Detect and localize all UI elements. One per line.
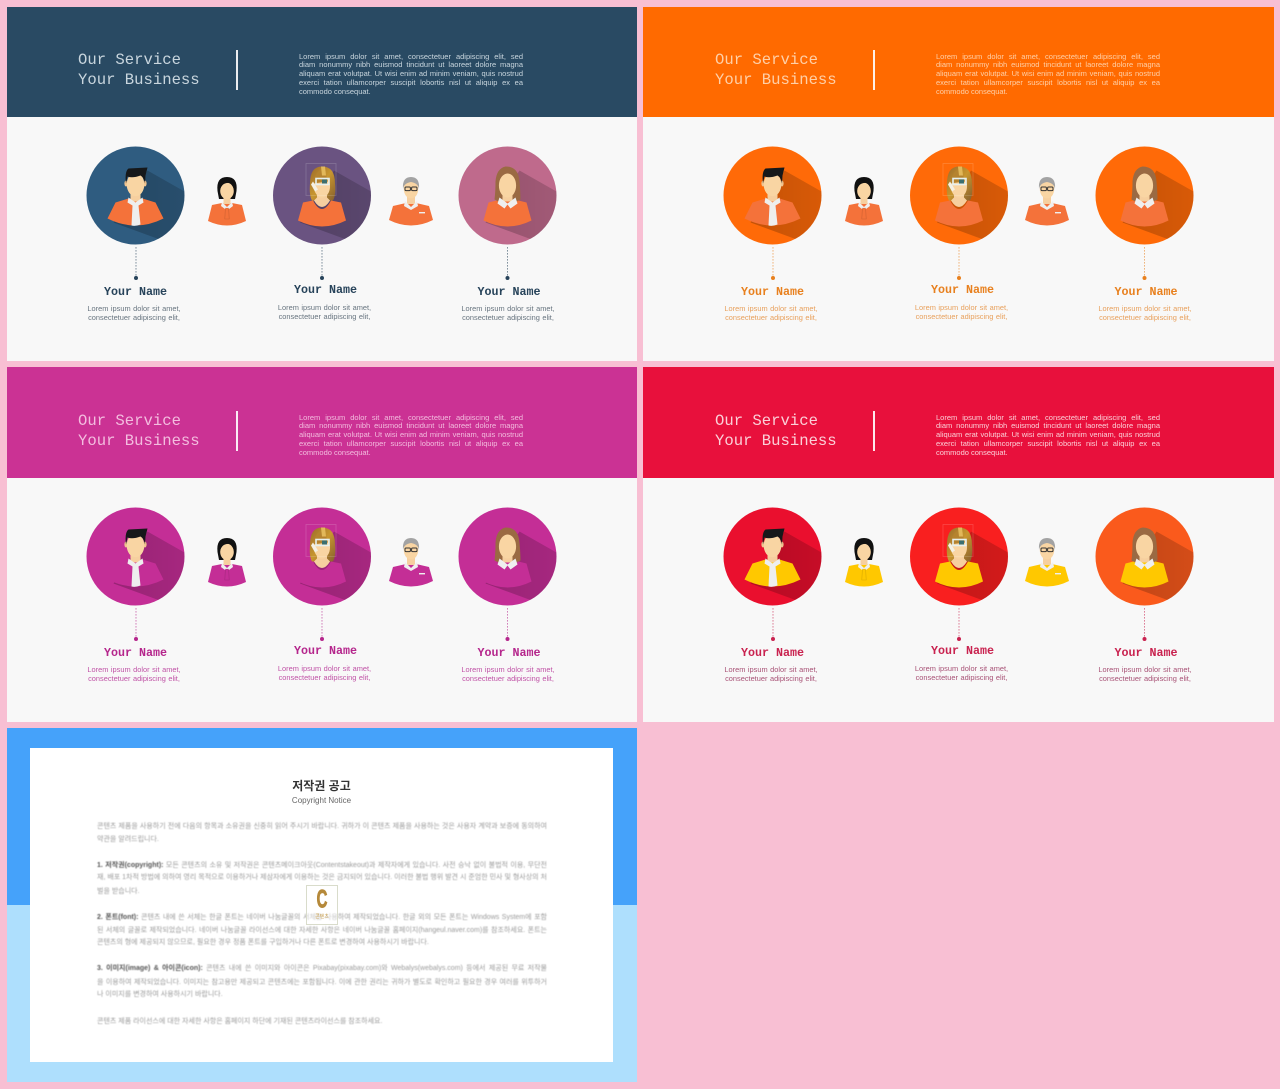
header paragraph — [936, 52, 1160, 96]
header paragraph: Lorem ipsum dolor sit amet, consectetuer adipiscing elit, sed — [299, 412, 523, 422]
notice body text: 3. 이미지(image) & 아이콘(icon): 콘텐츠 내에 쓴 이미지와 아이콘은 Pixabay(pixabay.com)와 Webalys(webalys.com) 등에서 제공된 무료 저작물 — [97, 965, 547, 972]
slide content — [78, 50, 556, 322]
avatar: woman — [458, 508, 578, 618]
avatar: woman with glasses — [273, 146, 392, 258]
panel: magenta service slide — [7, 367, 637, 722]
connector two — [320, 247, 324, 280]
description three — [1098, 665, 1192, 683]
slide content — [715, 50, 1194, 322]
heading: Your Business — [715, 70, 837, 88]
notice subtitle: Copyright Notice — [292, 796, 351, 805]
avatar: small woman — [208, 177, 246, 226]
header paragraph — [936, 412, 1160, 456]
description three: Lorem ipsum dolor sit amet, — [461, 665, 555, 674]
description one — [87, 304, 181, 322]
avatar: small woman — [208, 538, 246, 586]
notice body text: 약관을 알려드립니다. — [97, 836, 159, 843]
description three: consectetuer adipiscing elit, — [1099, 313, 1191, 322]
notice card — [30, 748, 613, 1062]
header paragraph: diam nonummy nibh euismod tincidunt ut laoreet dolore magna — [299, 60, 523, 69]
description two: consectetuer adipiscing elit, — [916, 312, 1007, 321]
header paragraph: diam nonummy nibh euismod tincidunt ut laoreet dolore magna — [299, 421, 523, 430]
notice body text — [96, 822, 547, 1025]
name one: Your Name — [741, 646, 804, 660]
header paragraph: exerci tation ullamcorper suscipit lobortis nisl ut aliquip ex ea — [299, 439, 523, 448]
description two: Lorem ipsum dolor sit amet, — [278, 303, 371, 312]
name one: Your Name — [104, 285, 167, 299]
description one: consectetuer adipiscing elit, — [88, 313, 180, 322]
description two: consectetuer adipiscing elit, — [279, 673, 370, 682]
notice body text: 콘텐츠 제품을 사용하기 전에 다음의 항목과 소유권을 신중히 읽어 주시기 바랍니다. 귀하가 이 콘텐츠 제품을 사용하는 것은 사용자 계약과 보증에 동의하여 — [97, 823, 547, 830]
header paragraph: exerci tation ullamcorper suscipit lobortis nisl ut aliquip ex ea — [299, 78, 523, 87]
description one: Lorem ipsum dolor sit amet, — [724, 304, 818, 313]
notice body text: 벌을 받습니다. — [97, 888, 140, 895]
description two — [915, 664, 1008, 682]
description two: Lorem ipsum dolor sit amet, — [915, 303, 1008, 312]
team avatars — [86, 508, 556, 641]
header band — [7, 367, 637, 478]
description two — [278, 664, 371, 682]
connector three — [506, 247, 510, 280]
name two: Your Name — [294, 283, 357, 297]
notice body text: 콘텐츠 제품 라이선스에 대한 자세한 사항은 홈페이지 하단에 기재된 콘텐츠라이선스를 참조하세요. — [97, 1018, 382, 1025]
description three: consectetuer adipiscing elit, — [462, 674, 554, 683]
watermark logo: C — [317, 885, 327, 914]
connector one — [134, 608, 138, 641]
header paragraph: Lorem ipsum dolor sit amet, consectetuer adipiscing elit, sed — [936, 52, 1160, 60]
connector one — [771, 247, 775, 280]
connector two — [320, 608, 324, 641]
team avatars — [724, 146, 1194, 280]
name one: Your Name — [104, 646, 167, 660]
header paragraph: diam nonummy nibh euismod tincidunt ut laoreet dolore magna — [936, 60, 1160, 69]
name one: Your Name — [741, 285, 804, 299]
connector one — [134, 247, 138, 280]
header paragraph — [299, 52, 524, 96]
panel: navy service slide — [7, 7, 637, 361]
heading — [715, 51, 837, 88]
avatar: older man — [389, 177, 433, 226]
description three — [461, 304, 555, 322]
header paragraph: Lorem ipsum dolor sit amet, consectetuer adipiscing elit, sed — [936, 412, 1160, 422]
heading: Our Service — [715, 51, 818, 69]
name three: Your Name — [478, 285, 540, 299]
watermark logo: 콘텐츠 — [315, 914, 329, 920]
header paragraph: commodo consequat. — [936, 86, 1008, 96]
description one: Lorem ipsum dolor sit amet, — [87, 304, 181, 313]
description one: Lorem ipsum dolor sit amet, — [724, 665, 818, 674]
heading: Our Service — [78, 51, 181, 69]
description one: consectetuer adipiscing elit, — [88, 674, 180, 683]
name three: Your Name — [1115, 285, 1177, 299]
header paragraph: diam nonummy nibh euismod tincidunt ut laoreet dolore magna — [936, 421, 1160, 430]
heading — [715, 412, 837, 450]
description three: Lorem ipsum dolor sit amet, — [461, 304, 555, 313]
description three: consectetuer adipiscing elit, — [462, 313, 554, 322]
header paragraph: aliquam erat volutpat. Ut wisi enim ad minim veniam, quis nostrud — [936, 69, 1160, 78]
avatar: woman with glasses — [910, 146, 1029, 258]
description two: Lorem ipsum dolor sit amet, — [915, 664, 1008, 673]
heading: Your Business — [715, 432, 837, 450]
notice body text: 된 서체의 글꼴로 제작되었습니다. 네이버 나눔글꼴 라이선스에 대한 자세한 사항은 네이버 나눔글꼴 홈페이지(hangeul.naver.com)를 참조하세요. 폰트는 — [97, 927, 547, 934]
avatar: small woman — [845, 177, 883, 226]
heading: Your Business — [78, 432, 200, 450]
header divider — [873, 50, 875, 90]
avatar: woman — [1096, 146, 1214, 258]
notice body text: 나 이미지를 변경하여 사용하시기 바랍니다. — [97, 991, 223, 998]
notice body text: 2. 폰트(font): 콘텐츠 내에 쓴 서체는 한글 폰트는 네이버 나눔글꼴의 서체를 사용하여 제작되었습니다. 한글 외의 모든 폰트는 Windows System에 포함 — [97, 914, 547, 921]
header divider — [236, 411, 238, 451]
description three: consectetuer adipiscing elit, — [1099, 674, 1191, 683]
description one — [724, 665, 818, 683]
avatar: man — [724, 508, 842, 618]
header paragraph: aliquam erat volutpat. Ut wisi enim ad minim veniam, quis nostrud — [936, 430, 1160, 439]
header paragraph: commodo consequat. — [299, 86, 371, 96]
header paragraph: commodo consequat. — [936, 448, 1008, 456]
avatar: woman — [1096, 508, 1214, 618]
connector three — [506, 608, 510, 641]
name three: Your Name — [478, 646, 540, 660]
heading: Our Service — [78, 412, 181, 430]
description one: Lorem ipsum dolor sit amet, — [87, 665, 181, 674]
connector three — [1142, 608, 1146, 641]
description three — [461, 665, 555, 683]
header band — [7, 7, 637, 117]
avatar: small woman — [845, 538, 883, 586]
panel: copyright notice — [7, 728, 637, 1082]
description one: consectetuer adipiscing elit, — [725, 313, 817, 322]
avatar: woman — [458, 146, 578, 258]
header paragraph — [299, 412, 524, 456]
name two: Your Name — [294, 644, 357, 658]
avatar: woman with glasses — [910, 508, 1029, 618]
slide content — [715, 411, 1194, 683]
team avatars — [724, 508, 1194, 641]
panel: red service slide — [643, 367, 1274, 722]
watermark logo — [306, 885, 338, 925]
notice body text: 1. 저작권(copyright): 모든 콘텐츠의 소유 및 저작권은 콘텐츠메이크아웃(Contentstakeout)과 제작자에게 있습니다. 사전 승낙 없이 불법적 이용, 무단전 — [97, 862, 547, 869]
header band — [643, 7, 1274, 117]
heading: Your Business — [78, 70, 200, 88]
avatar: older man — [1025, 538, 1069, 586]
description three — [1098, 304, 1192, 322]
avatar: woman with glasses — [273, 508, 392, 618]
header band — [643, 367, 1274, 478]
description one: consectetuer adipiscing elit, — [725, 674, 817, 683]
connector one — [771, 608, 775, 641]
avatar: older man — [1025, 177, 1069, 226]
name two: Your Name — [931, 644, 994, 658]
header divider — [873, 411, 875, 451]
notice body text: 재, 배포 1차적 방법에 의하여 영리 목적으로 이용하거나 제삼자에게 이용하는 것은 금지되어 있습니다. 이러한 불법 행위 발견 시 준엄한 민사 및 형사상의 처 — [97, 874, 547, 881]
connector two — [957, 247, 961, 280]
avatar: older man — [389, 538, 433, 586]
avatar: man — [86, 508, 206, 618]
heading: Our Service — [715, 412, 818, 430]
connector three — [1142, 247, 1146, 280]
description two: consectetuer adipiscing elit, — [279, 312, 370, 321]
description two — [915, 303, 1008, 321]
description two: consectetuer adipiscing elit, — [916, 673, 1007, 682]
notice body text: 을 이용하여 제작되었습니다. 이미지는 참고용만 제공되고 콘텐츠에는 포함됩니다. 이에 관한 권리는 귀하가 별도로 확인하고 필요한 경우 여러를 위투하거 — [97, 979, 547, 986]
description one — [87, 665, 181, 683]
avatar: man — [724, 146, 842, 258]
name two: Your Name — [931, 283, 994, 297]
team avatars — [86, 146, 556, 280]
slide content — [78, 411, 556, 683]
heading — [78, 412, 200, 450]
avatar: man — [86, 146, 206, 258]
header divider — [236, 50, 238, 90]
description two: Lorem ipsum dolor sit amet, — [278, 664, 371, 673]
header paragraph: aliquam erat volutpat. Ut wisi enim ad minim veniam, quis nostrud — [299, 430, 523, 439]
connector two — [957, 608, 961, 641]
header paragraph: aliquam erat volutpat. Ut wisi enim ad minim veniam, quis nostrud — [299, 69, 523, 78]
notice title: 저작권 공고 — [292, 779, 351, 793]
description three: Lorem ipsum dolor sit amet, — [1098, 304, 1192, 313]
header paragraph: commodo consequat. — [299, 448, 371, 456]
description three: Lorem ipsum dolor sit amet, — [1098, 665, 1192, 674]
description one — [724, 304, 818, 322]
notice body text: 콘텐츠의 형에 제공되지 않으므로, 필요한 경우 정품 폰트를 구입하거나 다른 폰트로 변경하여 사용하시기 바랍니다. — [97, 939, 429, 946]
header paragraph: exerci tation ullamcorper suscipit lobortis nisl ut aliquip ex ea — [936, 78, 1160, 87]
name three: Your Name — [1115, 646, 1177, 660]
heading — [78, 51, 200, 88]
header paragraph: Lorem ipsum dolor sit amet, consectetuer adipiscing elit, sed — [299, 52, 523, 60]
description two — [278, 303, 371, 321]
header paragraph: exerci tation ullamcorper suscipit lobortis nisl ut aliquip ex ea — [936, 439, 1160, 448]
panel: orange service slide — [643, 7, 1274, 361]
